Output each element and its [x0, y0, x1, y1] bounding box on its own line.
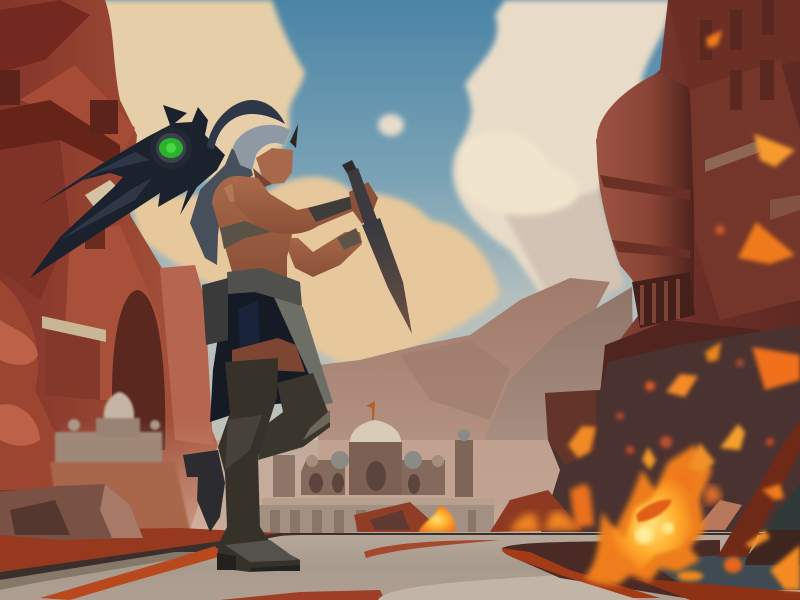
sword — [342, 160, 412, 334]
face — [256, 148, 293, 184]
archway — [112, 290, 165, 450]
right canyon wall — [540, 0, 800, 535]
cloud: haze lower right — [505, 190, 625, 320]
flag — [366, 401, 375, 420]
pouch — [202, 278, 228, 345]
clouds — [100, 0, 672, 365]
hair crest — [207, 100, 285, 150]
warrior figure — [30, 100, 412, 572]
round drum tower — [597, 72, 694, 305]
bracer: lower — [337, 228, 362, 250]
cloud: middle bank — [130, 177, 500, 365]
cloud: upper left — [100, 0, 305, 180]
carved tower shading — [0, 0, 90, 72]
skirt and back — [210, 280, 330, 422]
flying embers — [568, 30, 800, 590]
far tower — [160, 265, 213, 445]
ground: red earth — [0, 528, 800, 600]
panel tabard — [272, 293, 333, 405]
belt — [227, 268, 302, 306]
top band — [220, 221, 272, 249]
terrace — [262, 498, 495, 508]
stone floor — [0, 532, 800, 600]
hair back — [190, 148, 253, 265]
small palace, left — [50, 392, 190, 530]
central palace — [258, 401, 495, 534]
cloud: upper right — [453, 0, 672, 320]
palace body — [349, 442, 402, 495]
wing — [30, 105, 225, 278]
main dome — [350, 420, 401, 442]
thigh — [232, 338, 305, 372]
standing leg boot — [217, 358, 300, 572]
lava channel — [502, 540, 800, 600]
left canyon wall — [0, 0, 220, 530]
boulder: left — [0, 484, 143, 540]
front arm — [232, 180, 356, 234]
torso — [212, 176, 292, 278]
colonnade — [632, 272, 695, 328]
cloud: small puff — [378, 114, 404, 136]
cloud: bright right highlight — [460, 131, 579, 215]
rock strata — [0, 280, 78, 490]
distant mountains — [170, 278, 634, 540]
wooden beam, lower right — [717, 420, 800, 565]
dark lower fortress — [540, 325, 800, 535]
raised leg boot — [258, 373, 330, 460]
back arm — [283, 232, 362, 277]
raised foot — [183, 450, 225, 532]
gem — [159, 138, 183, 158]
bracer: upper tattoo — [308, 196, 356, 222]
lower haze — [60, 420, 220, 530]
fire — [570, 445, 722, 585]
horn — [290, 124, 298, 148]
hands — [349, 182, 378, 224]
boulders and flame at palace base — [354, 490, 742, 532]
